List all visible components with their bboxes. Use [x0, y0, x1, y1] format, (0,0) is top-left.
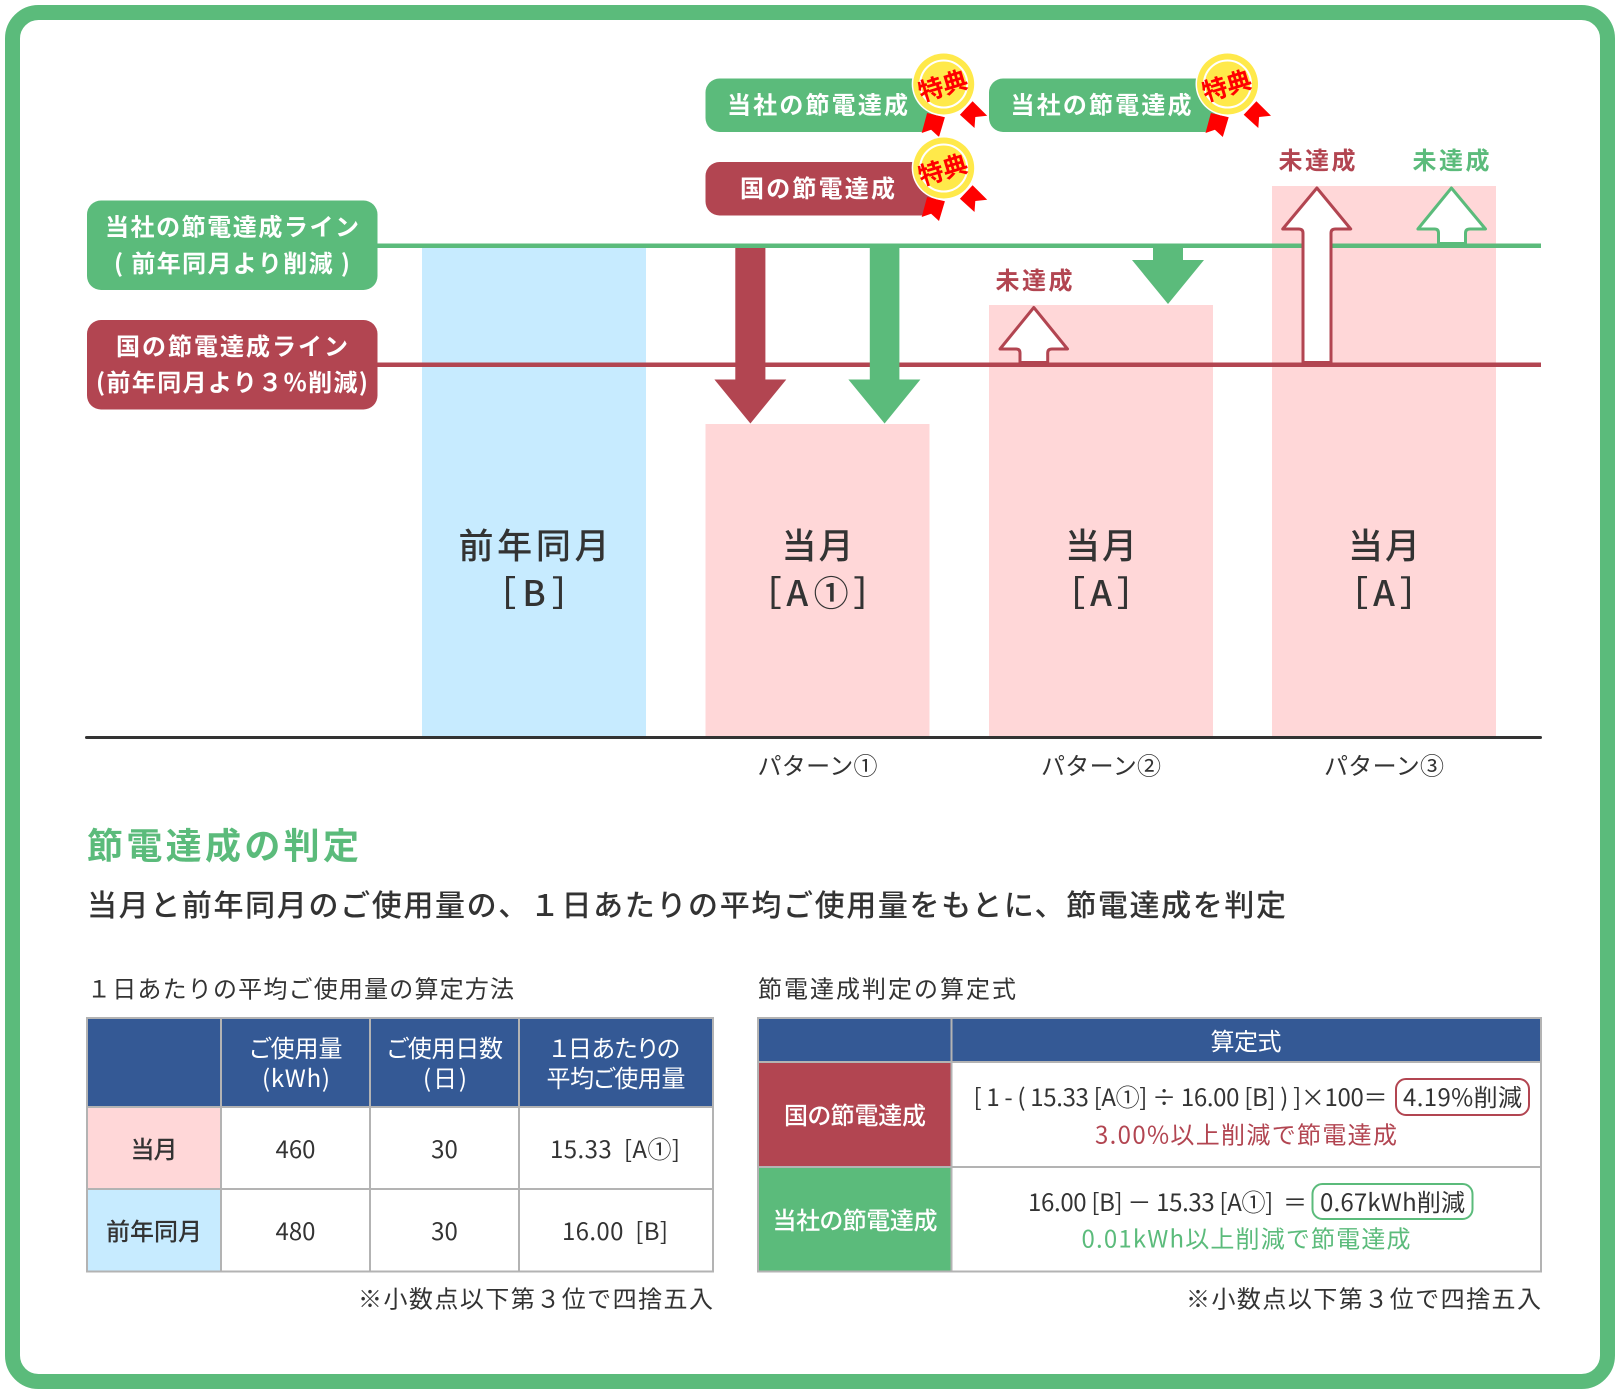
label: national target line: (前年同月より３%削減)	[96, 363, 368, 398]
bar: previous year month: 前年同月	[458, 518, 610, 570]
row: company target	[772, 1183, 1472, 1254]
bar: current month pattern 2: ［A］	[1067, 566, 1135, 617]
row: previous year month: 16.00 [B]	[562, 1212, 668, 1247]
icon: bonus rosette 1: 特典	[914, 60, 972, 109]
achievement pill: national pattern 1: 国の節電達成	[740, 169, 895, 204]
row: previous year month: 480	[276, 1212, 315, 1247]
label: not achieved pattern 3 company: 未達成	[1412, 141, 1490, 176]
label: not achieved pattern 3 national: 未達成	[1278, 141, 1356, 176]
note: right table: ※小数点以下第３位で四捨五入	[1186, 1280, 1541, 1314]
table header: (kWh)	[262, 1059, 330, 1094]
row: national target	[784, 1078, 1529, 1150]
achievement pill: national pattern 1	[706, 162, 936, 216]
row: previous year month: 30	[431, 1212, 458, 1247]
table header	[250, 1029, 686, 1094]
table header: １日あたりの	[550, 1029, 680, 1064]
arrow: company reduction pattern 2	[1132, 248, 1204, 304]
table header: 平均ご使用量	[546, 1059, 686, 1094]
heading: 節電達成の判定	[87, 818, 359, 870]
bar: current month pattern 1: 当月	[782, 518, 854, 570]
row: current month: 30	[431, 1130, 458, 1165]
label: national target line	[87, 320, 378, 410]
company target line	[370, 244, 1541, 248]
table: judgement formula	[758, 1018, 1541, 1272]
table: average daily usage	[87, 1018, 713, 1272]
table header: ご使用量	[250, 1029, 342, 1064]
pattern label 2: パターン②	[1041, 746, 1161, 782]
label: company target line: ( 前年同月より削減 )	[114, 244, 350, 279]
bar: current month pattern 3: 当月	[1348, 518, 1420, 570]
row: company target: 0.67kWh削減	[1320, 1183, 1465, 1218]
table header: ご使用日数	[387, 1029, 503, 1064]
icon: bonus rosette 3	[912, 136, 987, 221]
label: national target line: 国の節電達成ライン	[116, 327, 348, 362]
achievement pill: company pattern 1: 当社の節電達成	[727, 86, 908, 120]
subheading: 当月と前年同月のご使用量の、１日あたりの平均ご使用量をもとに、節電達成を判定	[87, 881, 1286, 925]
bar: current month pattern 1	[706, 424, 930, 737]
row: current month	[130, 1130, 680, 1165]
row: national target: 国の節電達成	[784, 1096, 926, 1131]
bar: current month pattern 2: 当月	[1065, 518, 1137, 570]
row: current month: 15.33 [A①]	[550, 1130, 680, 1165]
row: current month: 当月	[130, 1130, 178, 1165]
achievement pill: company pattern 2: 当社の節電達成	[1010, 86, 1192, 120]
row: national target: [ 1 - ( 15.33 [A①] ÷ 16.00 [B] ) ]×100＝	[974, 1078, 1388, 1113]
bar: current month pattern 1: ［A①］	[764, 566, 872, 617]
arrow: national not achieved pattern 2	[1000, 308, 1068, 362]
arrow: company reduction pattern 1	[848, 248, 920, 424]
arrow: company not achieved pattern 3	[1418, 188, 1486, 244]
note: left table: ※小数点以下第３位で四捨五入	[358, 1280, 713, 1314]
arrow: national not achieved pattern 3	[1283, 188, 1351, 362]
row: national target: 3.00%以上削減で節電達成	[1095, 1116, 1397, 1150]
row: company target: 0.01kWh以上削減で節電達成	[1082, 1220, 1410, 1254]
pattern label 3: パターン③	[1324, 746, 1444, 782]
bar: current month pattern 3	[1272, 186, 1496, 737]
achievement pill: company pattern 1	[706, 78, 936, 132]
icon: bonus rosette 3: 特典	[914, 144, 972, 193]
achievement pill: company pattern 2	[989, 78, 1219, 132]
caption: right table: 節電達成判定の算定式	[758, 970, 1016, 1004]
row: current month: 460	[276, 1130, 315, 1165]
row: company target: 当社の節電達成	[772, 1201, 938, 1236]
row: company target: 16.00 [B] － 15.33 [A①] ＝	[1028, 1183, 1307, 1218]
bar: previous year month: ［B］	[498, 566, 570, 617]
icon: bonus rosette 2: 特典	[1197, 60, 1256, 109]
label: not achieved pattern 2: 未達成	[996, 261, 1072, 296]
arrow: national reduction pattern 1	[714, 248, 786, 424]
table header: 算定式	[1210, 1022, 1282, 1057]
national target line	[370, 362, 1541, 367]
caption: left table: １日あたりの平均ご使用量の算定方法	[87, 970, 514, 1004]
label: company target line	[87, 200, 378, 290]
icon: bonus rosette 2	[1196, 52, 1271, 137]
label: company target line: 当社の節電達成ライン	[105, 208, 359, 242]
table header: (日)	[423, 1059, 467, 1094]
row: national target: 4.19%削減	[1403, 1078, 1522, 1113]
bar: current month pattern 2	[989, 305, 1213, 737]
row: previous year month: 前年同月	[106, 1212, 202, 1247]
bar: current month pattern 3: ［A］	[1350, 566, 1418, 617]
row: previous year month	[106, 1212, 668, 1247]
bar: previous year month	[422, 248, 646, 737]
pattern label 1: パターン①	[758, 746, 878, 782]
icon: bonus rosette 1	[912, 52, 987, 137]
baseline axis	[85, 736, 1542, 739]
